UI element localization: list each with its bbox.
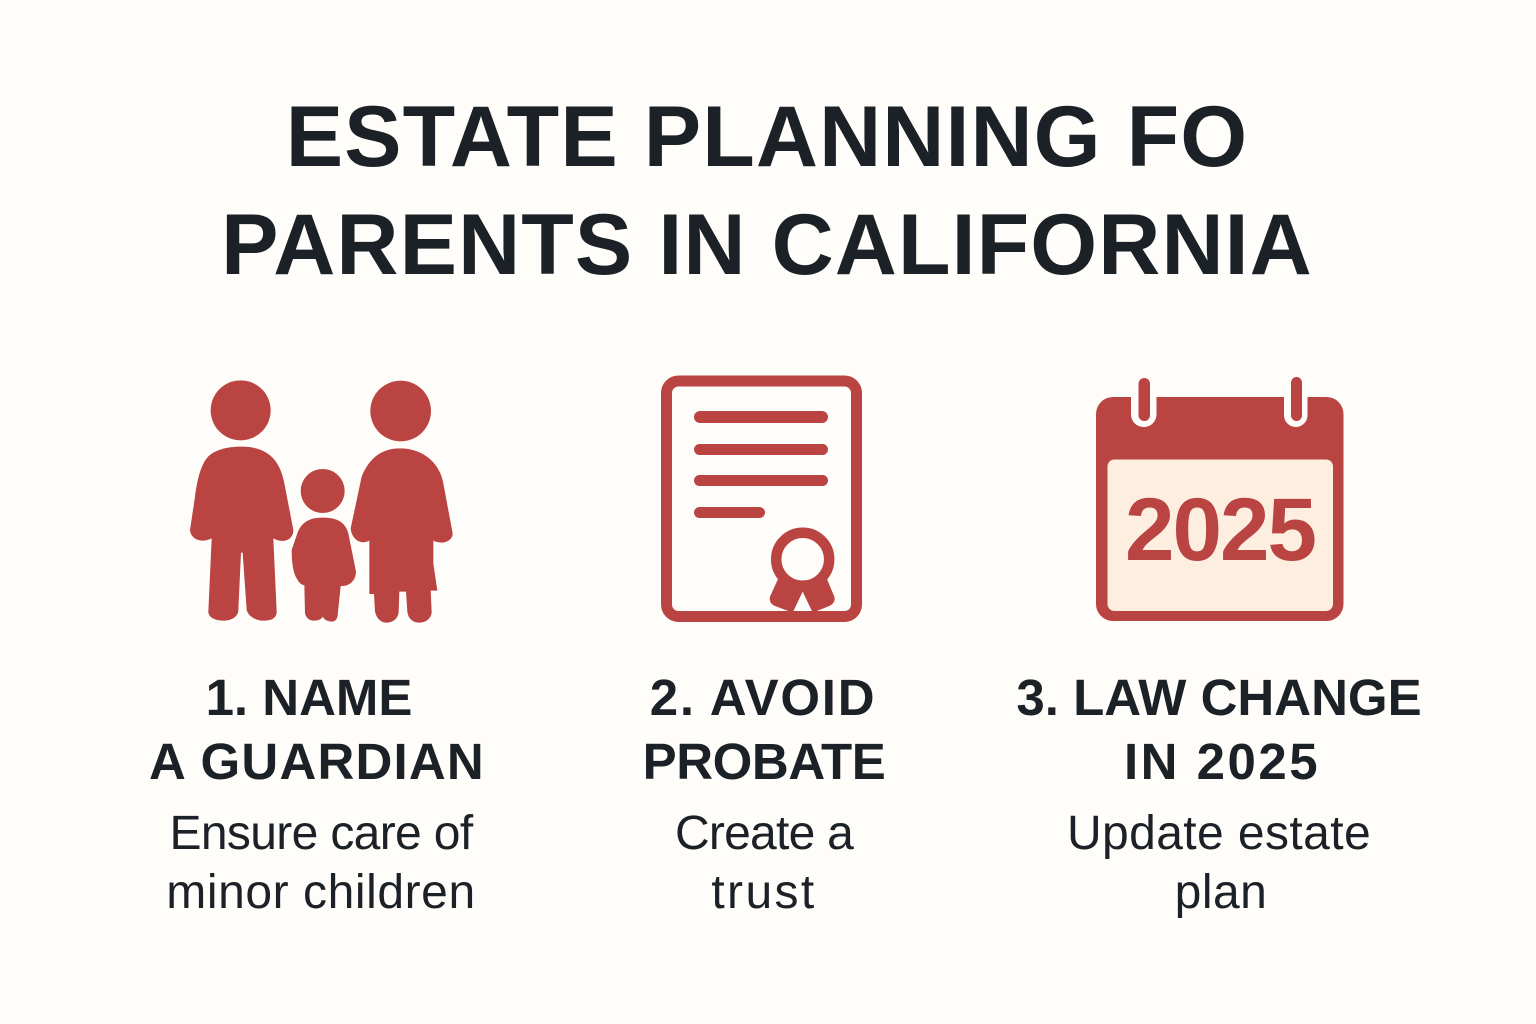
- title: ESTATE PLANNING FO: [286, 89, 1248, 185]
- column 2 heading: [643, 669, 885, 790]
- column 1 heading: 1. NAME: [206, 669, 412, 726]
- father: [190, 380, 293, 621]
- column 2 text: trust: [711, 866, 817, 919]
- seal ring: [776, 533, 829, 586]
- column 1 text: minor children: [166, 866, 476, 919]
- column 3 text: plan: [1175, 866, 1267, 919]
- column 1 heading: A GUARDIAN: [149, 733, 485, 790]
- column 2 heading: PROBATE: [643, 733, 885, 790]
- icon: document with seal: [666, 381, 856, 616]
- document lines: [694, 411, 828, 518]
- icon: calendar 2025: [1096, 375, 1344, 621]
- seal ribbon: [770, 578, 835, 613]
- column 1 heading: [149, 669, 485, 790]
- column 2 heading: 2. AVOID: [650, 669, 876, 726]
- column 3 heading: IN 2025: [1124, 733, 1320, 790]
- title: [221, 89, 1313, 293]
- column 1 text: [166, 807, 476, 919]
- title: PARENTS IN CALIFORNIA: [221, 197, 1313, 293]
- column 2 text: [675, 807, 854, 919]
- calendar body: [1096, 397, 1344, 621]
- column 2 text: Create a: [675, 807, 853, 860]
- calendar page: [1108, 460, 1333, 611]
- binding rings: [1131, 375, 1308, 427]
- column 1 text: Ensure care of: [169, 807, 473, 860]
- column 3 text: Update estate: [1067, 807, 1371, 860]
- column 3 heading: 3. LAW CHANGE: [1016, 669, 1422, 726]
- year: 2025: [1125, 479, 1315, 579]
- icon: family: [190, 380, 453, 623]
- column 3 heading: [1016, 669, 1422, 790]
- document frame: [666, 381, 856, 616]
- child: [292, 469, 356, 622]
- mother: [351, 381, 453, 623]
- column 3 text: [1067, 807, 1371, 919]
